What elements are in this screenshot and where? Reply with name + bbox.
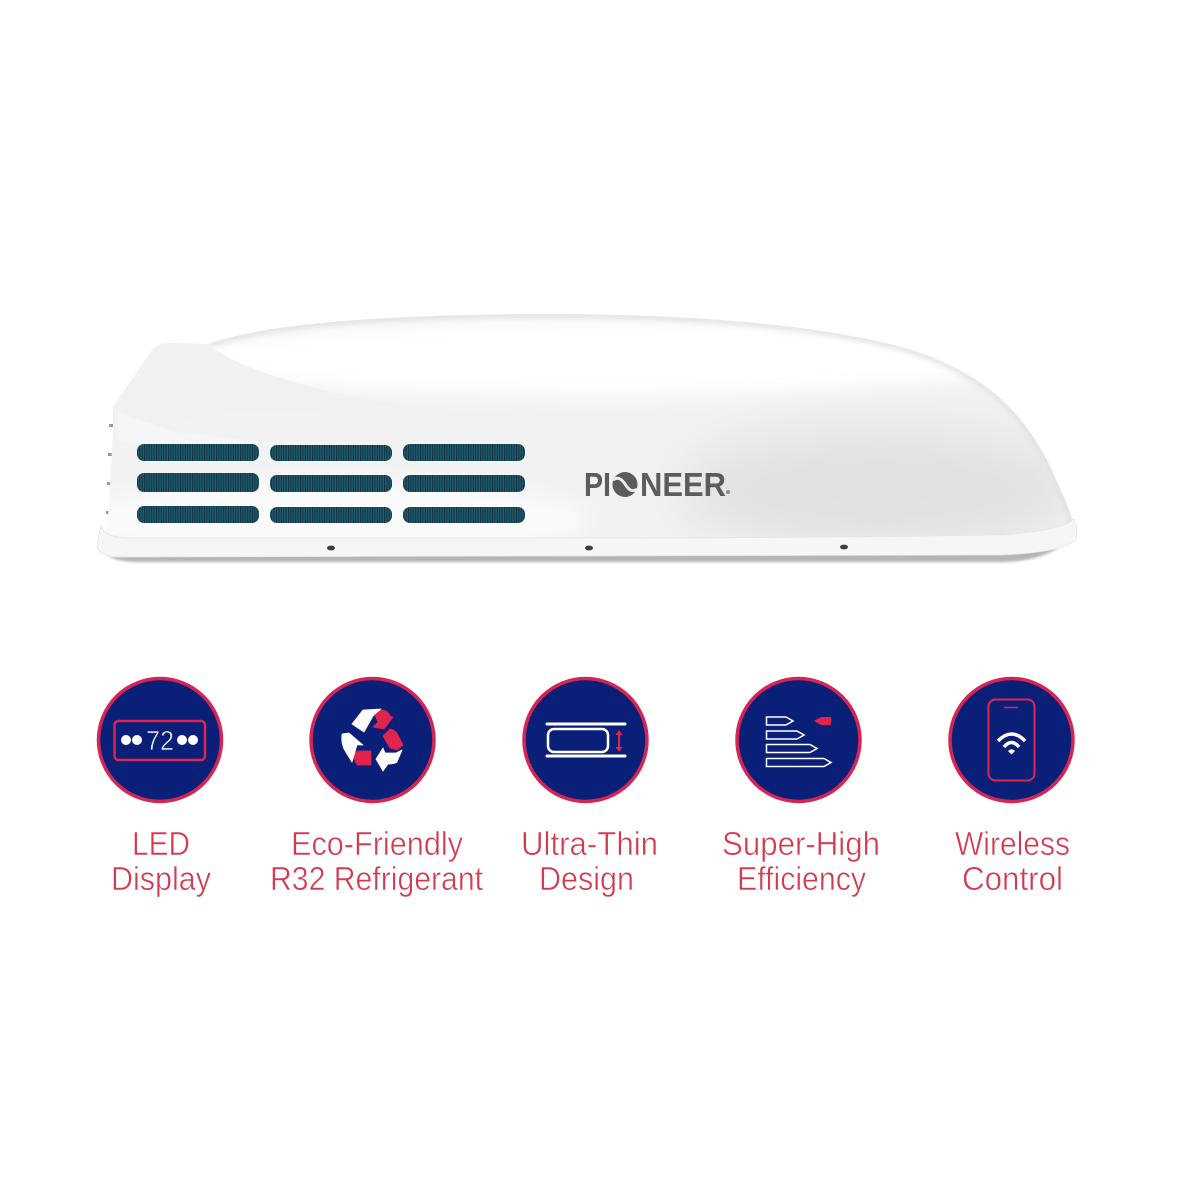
label: LED Display: LED [132,825,190,862]
label: Ultra-Thin Design: Ultra-Thin [521,825,658,862]
icon: LED display [98,678,222,802]
cap lip [191,348,290,382]
unit shadow [108,545,1062,562]
logo: Pioneer: PI [584,466,611,503]
logo: Pioneer: NEER [640,466,726,503]
icon: LED display: 72 [146,725,174,756]
label: Eco-Friendly R32 Refrigerant: Eco-Friendly [291,825,463,862]
label: Wireless Control: Wireless [955,825,1070,862]
side vent bumps [106,424,114,514]
label: Wireless Control: Control [962,860,1063,897]
base flange [97,519,1077,557]
icon: recycling [311,678,434,802]
logo: Pioneer [584,466,730,503]
label: Super-High Efficiency: Super-High [722,825,880,862]
screw holes [327,545,848,550]
label: LED Display: Display [111,860,211,897]
label: Super-High Efficiency: Efficiency [737,860,866,897]
grille [137,444,525,523]
top rim shading [208,314,1073,522]
icon: wireless control [950,678,1073,802]
icon: ultra-thin design [524,678,647,802]
product: rooftop air conditioner [70,300,1090,562]
shell [108,314,1072,538]
label: Eco-Friendly R32 Refrigerant: R32 Refrigerant [270,860,483,897]
label: Ultra-Thin Design: Design [539,860,634,897]
icon: super-high efficiency [737,678,860,802]
